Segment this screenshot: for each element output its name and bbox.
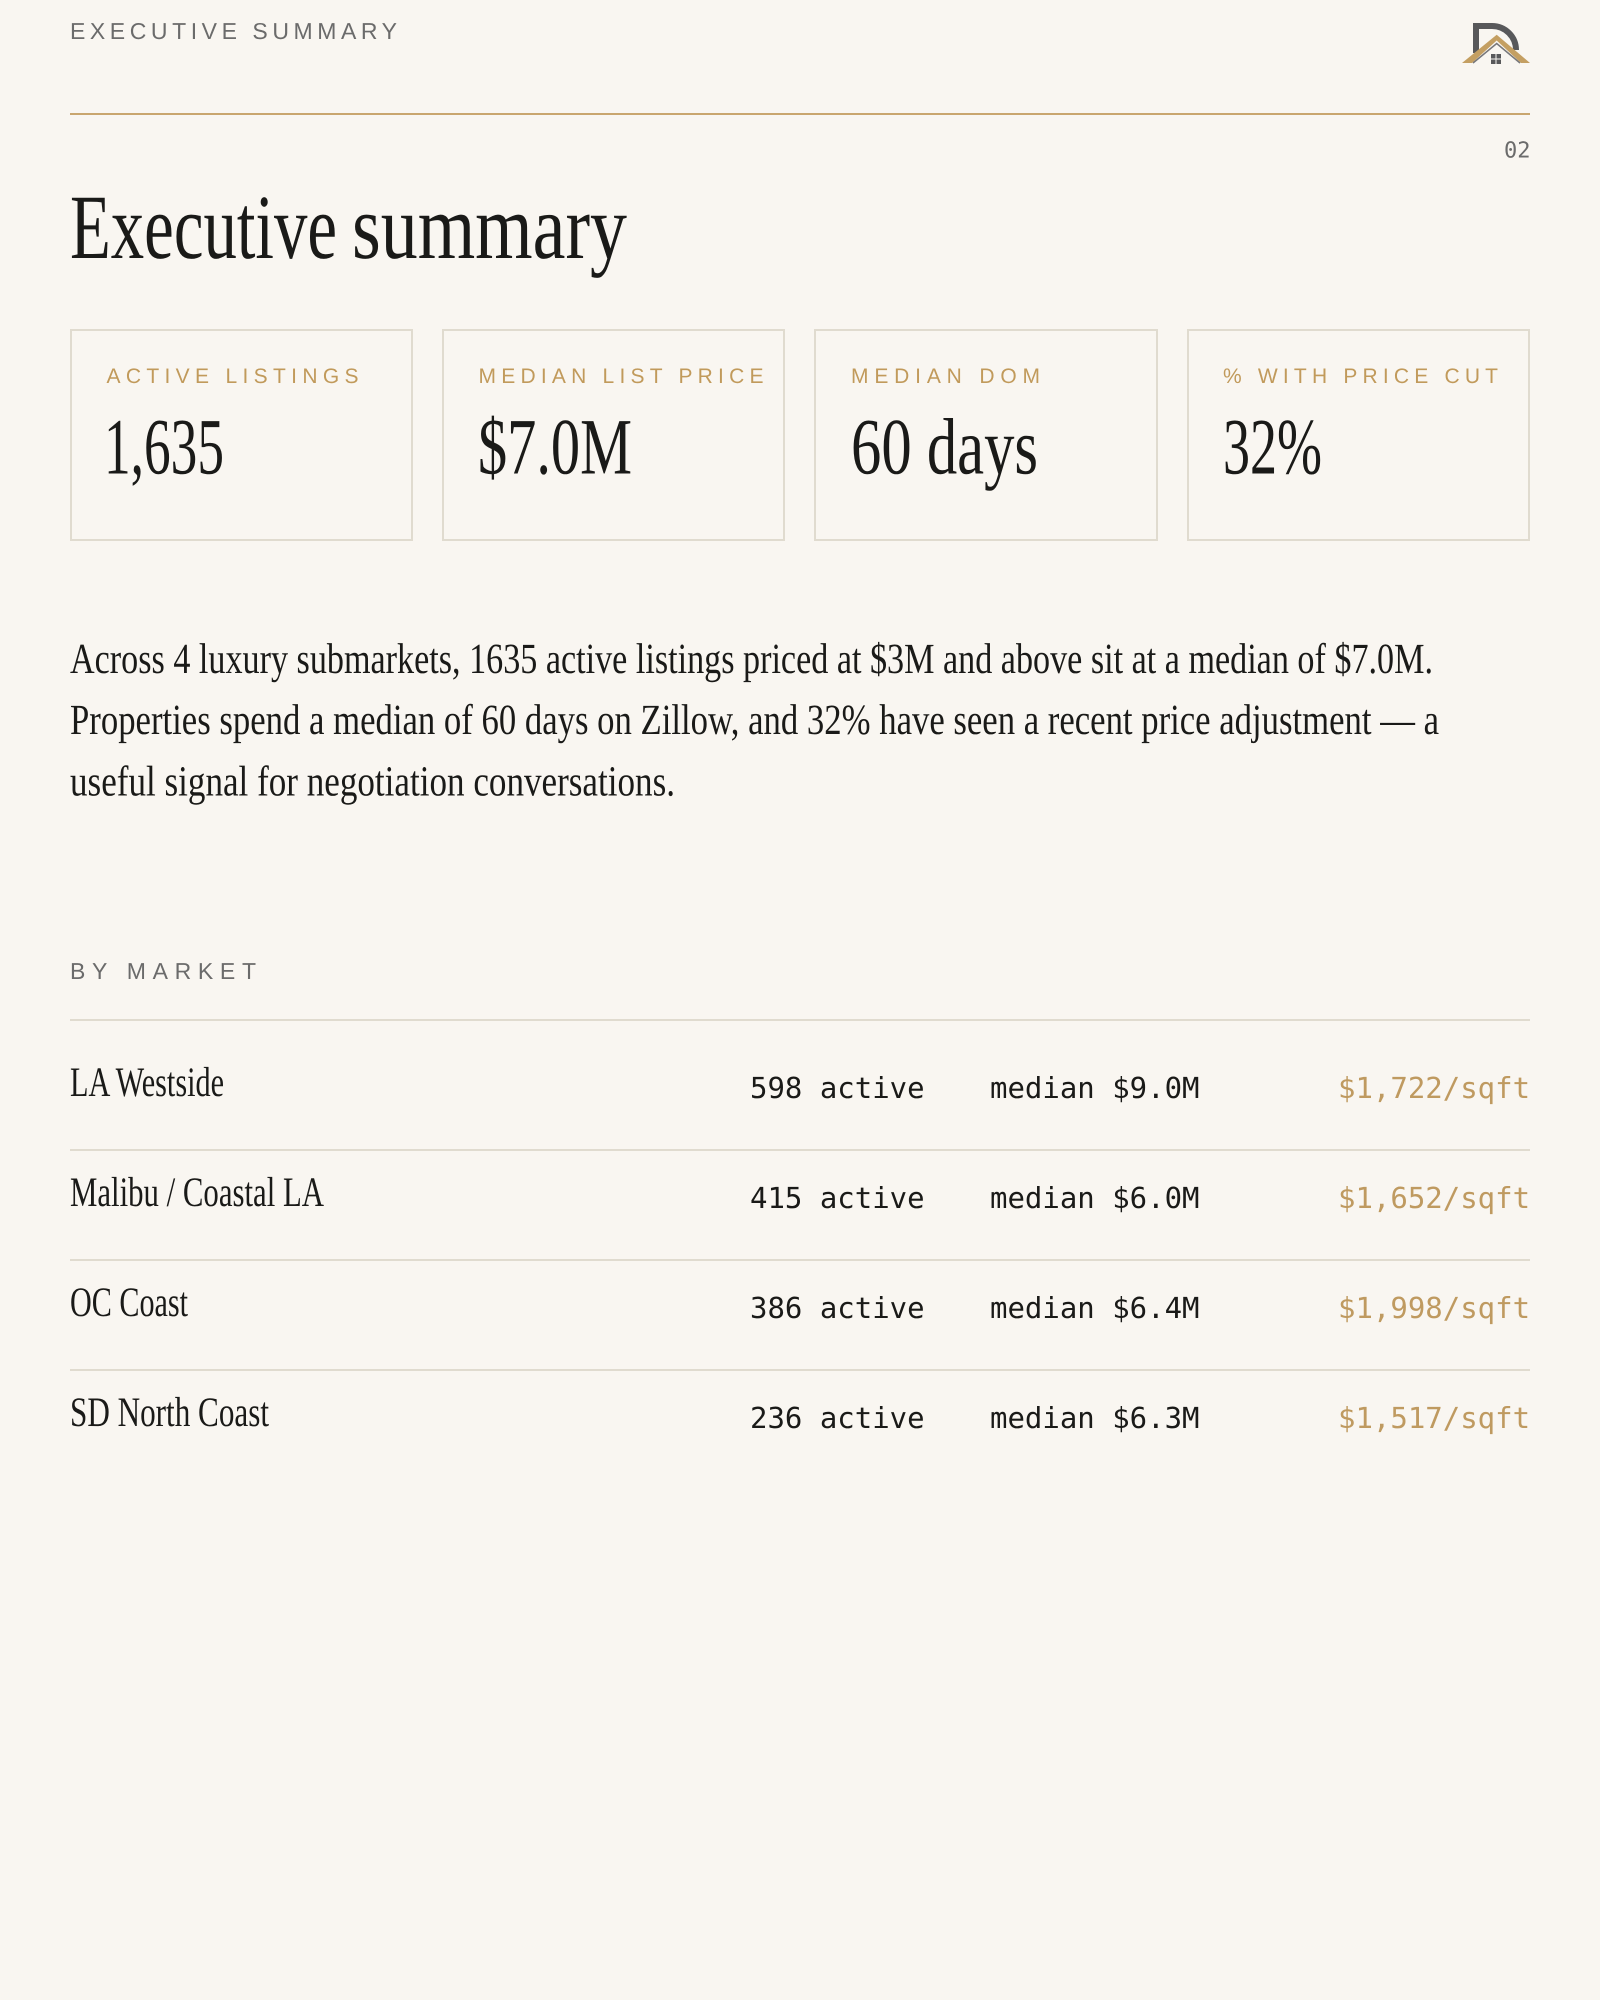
- row: Malibu / Coastal LA: [70, 1170, 1530, 1216]
- header label: EXECUTIVE SUMMARY: [70, 18, 397, 44]
- page number: 02: [1504, 138, 1530, 164]
- row: Malibu / Coastal LA: 415 active: [750, 1181, 925, 1215]
- row: SD North Coast: [70, 1390, 1530, 1436]
- label: median DOM: MEDIAN DOM: [851, 365, 1040, 388]
- title: Executive: [70, 176, 337, 278]
- value: percent with price cut: 32%: [1223, 404, 1322, 492]
- label: median list price: MEDIAN LIST PRICE: [478, 365, 764, 388]
- row: OC Coast: $1,998/sqft: [1338, 1291, 1530, 1325]
- value: active listings: 1,635: [104, 404, 224, 492]
- summary paragraph: useful signal for negotiation conversations.: [70, 758, 675, 806]
- row: Malibu / Coastal LA: median $6.0M: [990, 1181, 1200, 1215]
- title: summary: [352, 176, 627, 278]
- icon: house logo: [1462, 26, 1530, 64]
- value: median DOM: 60 days: [851, 404, 1038, 492]
- header rule: [70, 113, 1530, 115]
- summary paragraph: [70, 636, 1439, 806]
- row: Malibu / Coastal LA: Malibu / Coastal LA: [70, 1170, 324, 1216]
- row: LA Westside: [70, 1060, 1530, 1106]
- row: LA Westside: median $9.0M: [990, 1071, 1200, 1105]
- panel: active listings: [71, 330, 412, 540]
- row: OC Coast: [70, 1280, 1530, 1326]
- row: SD North Coast: 236 active: [750, 1401, 925, 1435]
- panel: median DOM: [815, 330, 1157, 540]
- row: LA Westside: LA Westside: [70, 1060, 224, 1106]
- row: LA Westside: $1,722/sqft: [1338, 1071, 1530, 1105]
- row: SD North Coast: SD North Coast: [70, 1390, 269, 1436]
- table: by market: [70, 1019, 1530, 1436]
- title: [70, 176, 627, 278]
- label: percent with price cut: % WITH PRICE CUT: [1223, 365, 1498, 388]
- row: OC Coast: OC Coast: [70, 1280, 188, 1326]
- row: SD North Coast: $1,517/sqft: [1338, 1401, 1530, 1435]
- value: median list price: $7.0M: [478, 404, 632, 492]
- panel: median list price: [443, 330, 784, 540]
- row: LA Westside: 598 active: [750, 1071, 925, 1105]
- panel: percent with price cut: [1188, 330, 1529, 540]
- row: OC Coast: median $6.4M: [990, 1291, 1200, 1325]
- row: OC Coast: 386 active: [750, 1291, 925, 1325]
- row: Malibu / Coastal LA: $1,652/sqft: [1338, 1181, 1530, 1215]
- section heading: by market: BY MARKET: [70, 958, 256, 984]
- label: active listings: ACTIVE LISTINGS: [106, 365, 358, 388]
- row: SD North Coast: median $6.3M: [990, 1401, 1200, 1435]
